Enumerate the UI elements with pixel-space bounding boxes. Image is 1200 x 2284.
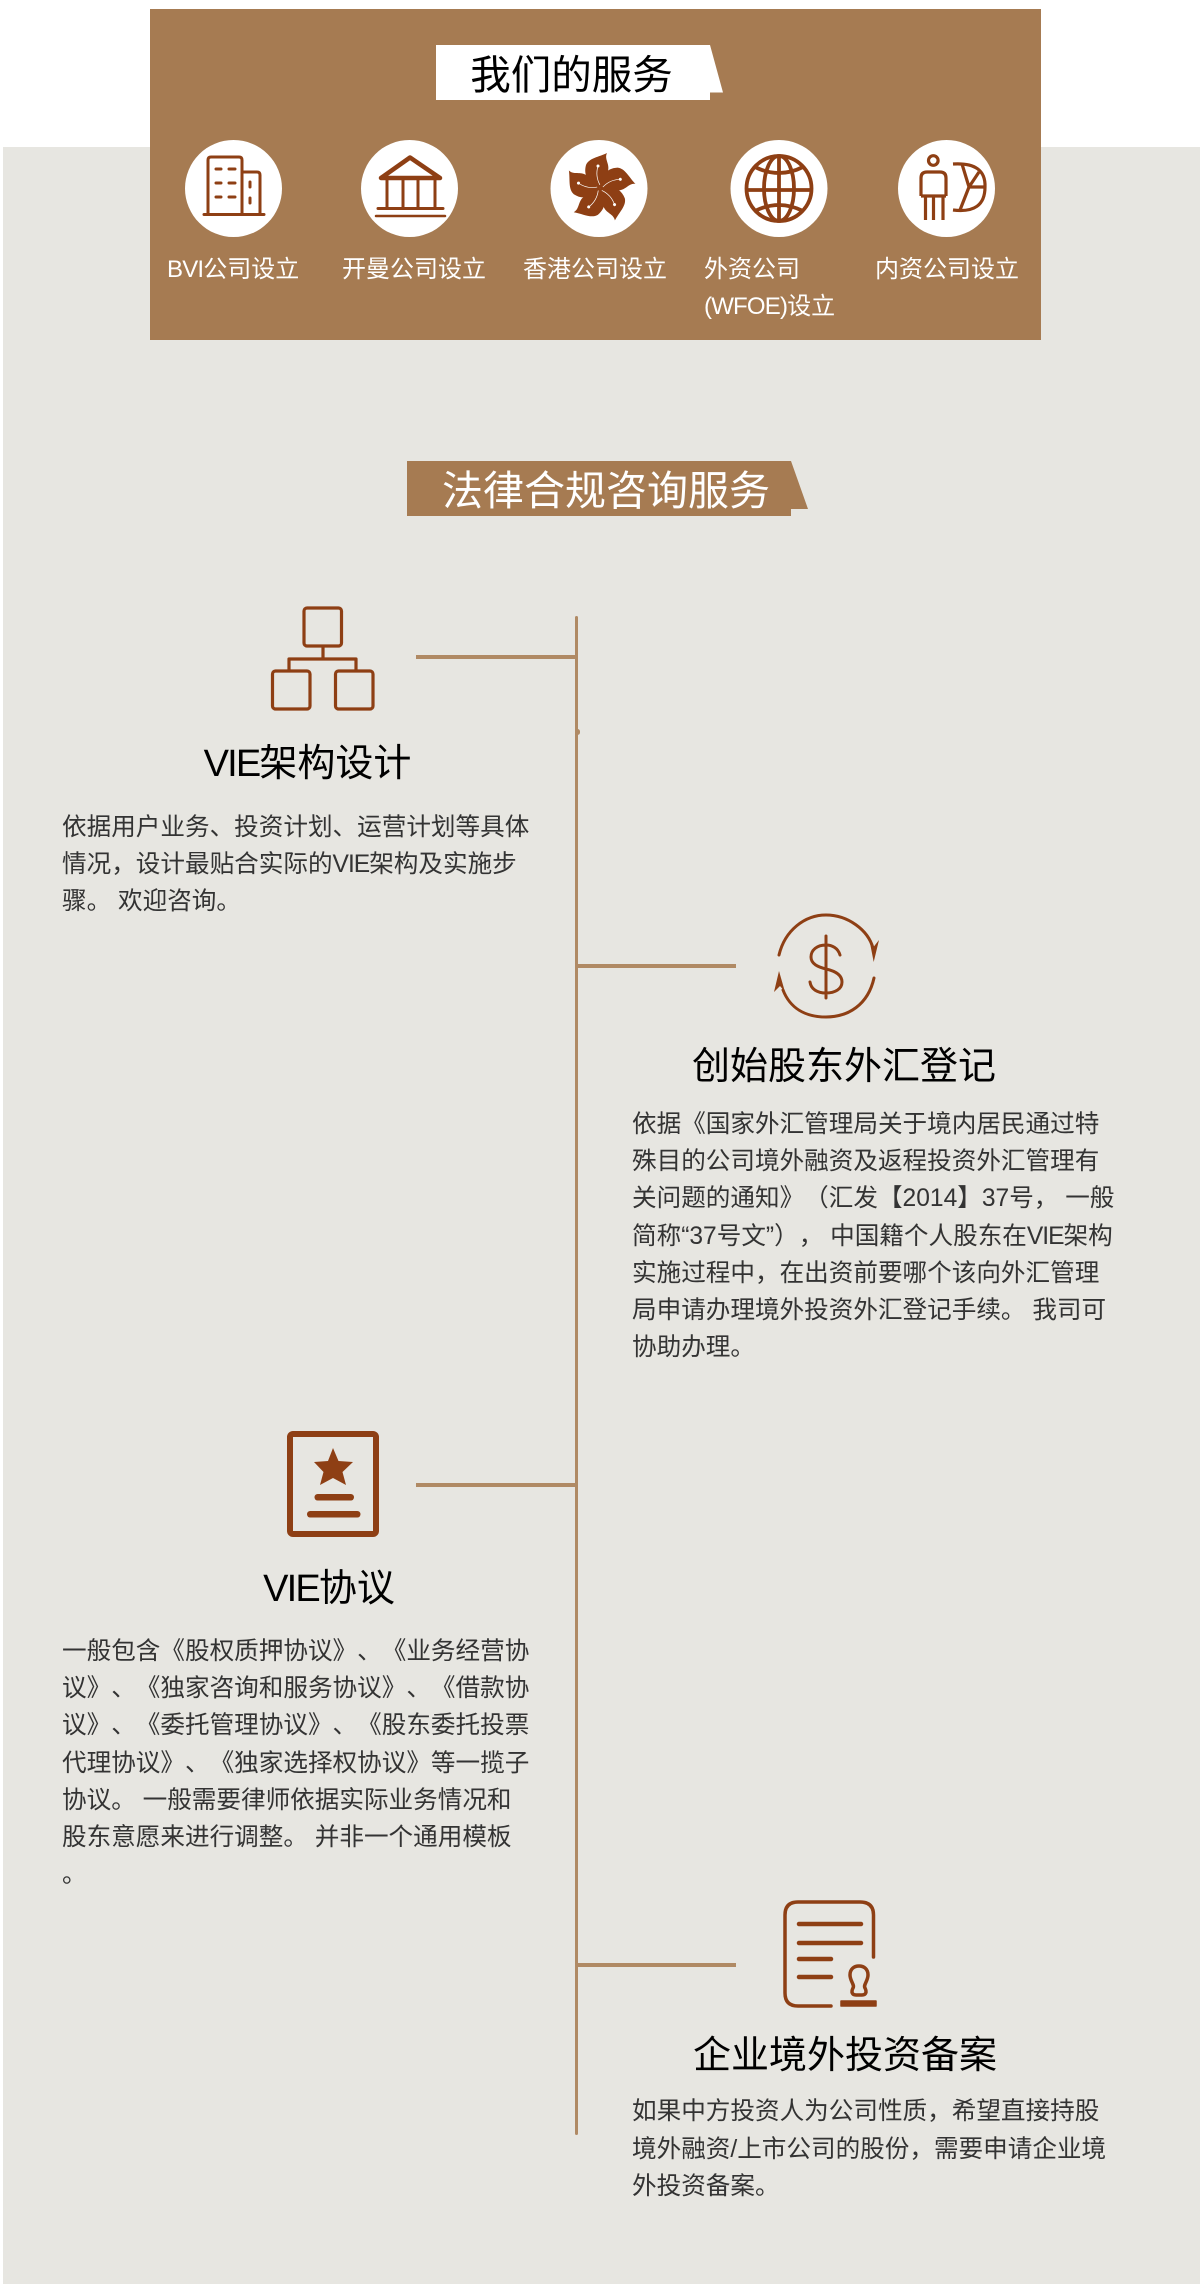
timeline: [416, 616, 736, 2135]
service labels: BVI公司设立: [167, 256, 299, 282]
service labels: 香港公司设立: [523, 256, 667, 282]
text: VIE agreements: 协议。 一般需要律师依据实际业务情况和: [62, 1787, 512, 1814]
text: VIE agreements: 代理协议》、《独家选择权协议》等一揽子: [62, 1750, 529, 1777]
text: VIE agreements: 议》、《独家咨询和服务协议》、《借款协: [62, 1675, 529, 1702]
heading: outbound investment filing: 企业境外投资备案: [693, 2034, 997, 2076]
panel: our services: [150, 9, 1041, 340]
text: founder FX registration: 简称“37号文”）， 中国籍个人股东在VIE架构: [632, 1223, 1113, 1250]
text: VIE structure design: 依据用户业务、投资计划、运营计划等具体: [62, 814, 529, 840]
text: founder FX registration: 依据《国家外汇管理局关于境内居民通过特: [632, 1111, 1099, 1138]
text: VIE agreements: 股东意愿来进行调整。 并非一个通用模板: [62, 1824, 512, 1851]
text: founder FX registration: [632, 1111, 1114, 1361]
text: VIE structure design: 情况，设计最贴合实际的VIE架构及实施步: [62, 851, 517, 878]
text: VIE structure design: 骤。 欢迎咨询。: [62, 888, 241, 915]
title: legal compliance consulting: 法律合规咨询服务: [442, 468, 770, 514]
text: founder FX registration: 协助办理。: [632, 1334, 755, 1361]
text: founder FX registration: 关问题的通知》（汇发【2014】37号， 一般: [632, 1185, 1114, 1212]
service labels: [167, 256, 1019, 320]
text: VIE agreements: 一般包含《股权质押协议》、《业务经营协: [62, 1638, 529, 1665]
heading: VIE structure design: VIE架构设计: [204, 743, 411, 785]
service labels: 内资公司设立: [875, 256, 1019, 282]
title: legal compliance consulting: [407, 461, 808, 516]
text: VIE agreements: 议》、《委托管理协议》、《股东委托投票: [62, 1712, 529, 1739]
text: founder FX registration: 殊目的公司境外融资及返程投资外汇管理有: [632, 1148, 1099, 1175]
heading: VIE agreements: VIE协议: [263, 1568, 395, 1610]
service labels: 外资公司: [704, 256, 800, 282]
text: VIE agreements: [62, 1638, 529, 1888]
title: our services: 我们的服务: [470, 52, 673, 98]
heading: founder FX registration: 创始股东外汇登记: [692, 1046, 996, 1088]
service labels: (WFOE)设立: [704, 292, 835, 320]
text: founder FX registration: 局申请办理境外投资外汇登记手续。 我司可: [632, 1297, 1106, 1324]
text: outbound investment filing: 外投资备案。: [632, 2173, 780, 2200]
text: VIE structure design: [62, 814, 529, 915]
text: outbound investment filing: 境外融资/上市公司的股份，需要申请企业境: [632, 2136, 1106, 2163]
text: founder FX registration: 实施过程中，在出资前要哪个该向外汇管理: [632, 1260, 1099, 1287]
title: our services: [436, 45, 723, 100]
service labels: 开曼公司设立: [342, 256, 486, 282]
text: VIE agreements: 。: [62, 1861, 87, 1888]
text: outbound investment filing: [632, 2098, 1106, 2200]
text: outbound investment filing: 如果中方投资人为公司性质，希望直接持股: [632, 2098, 1099, 2125]
